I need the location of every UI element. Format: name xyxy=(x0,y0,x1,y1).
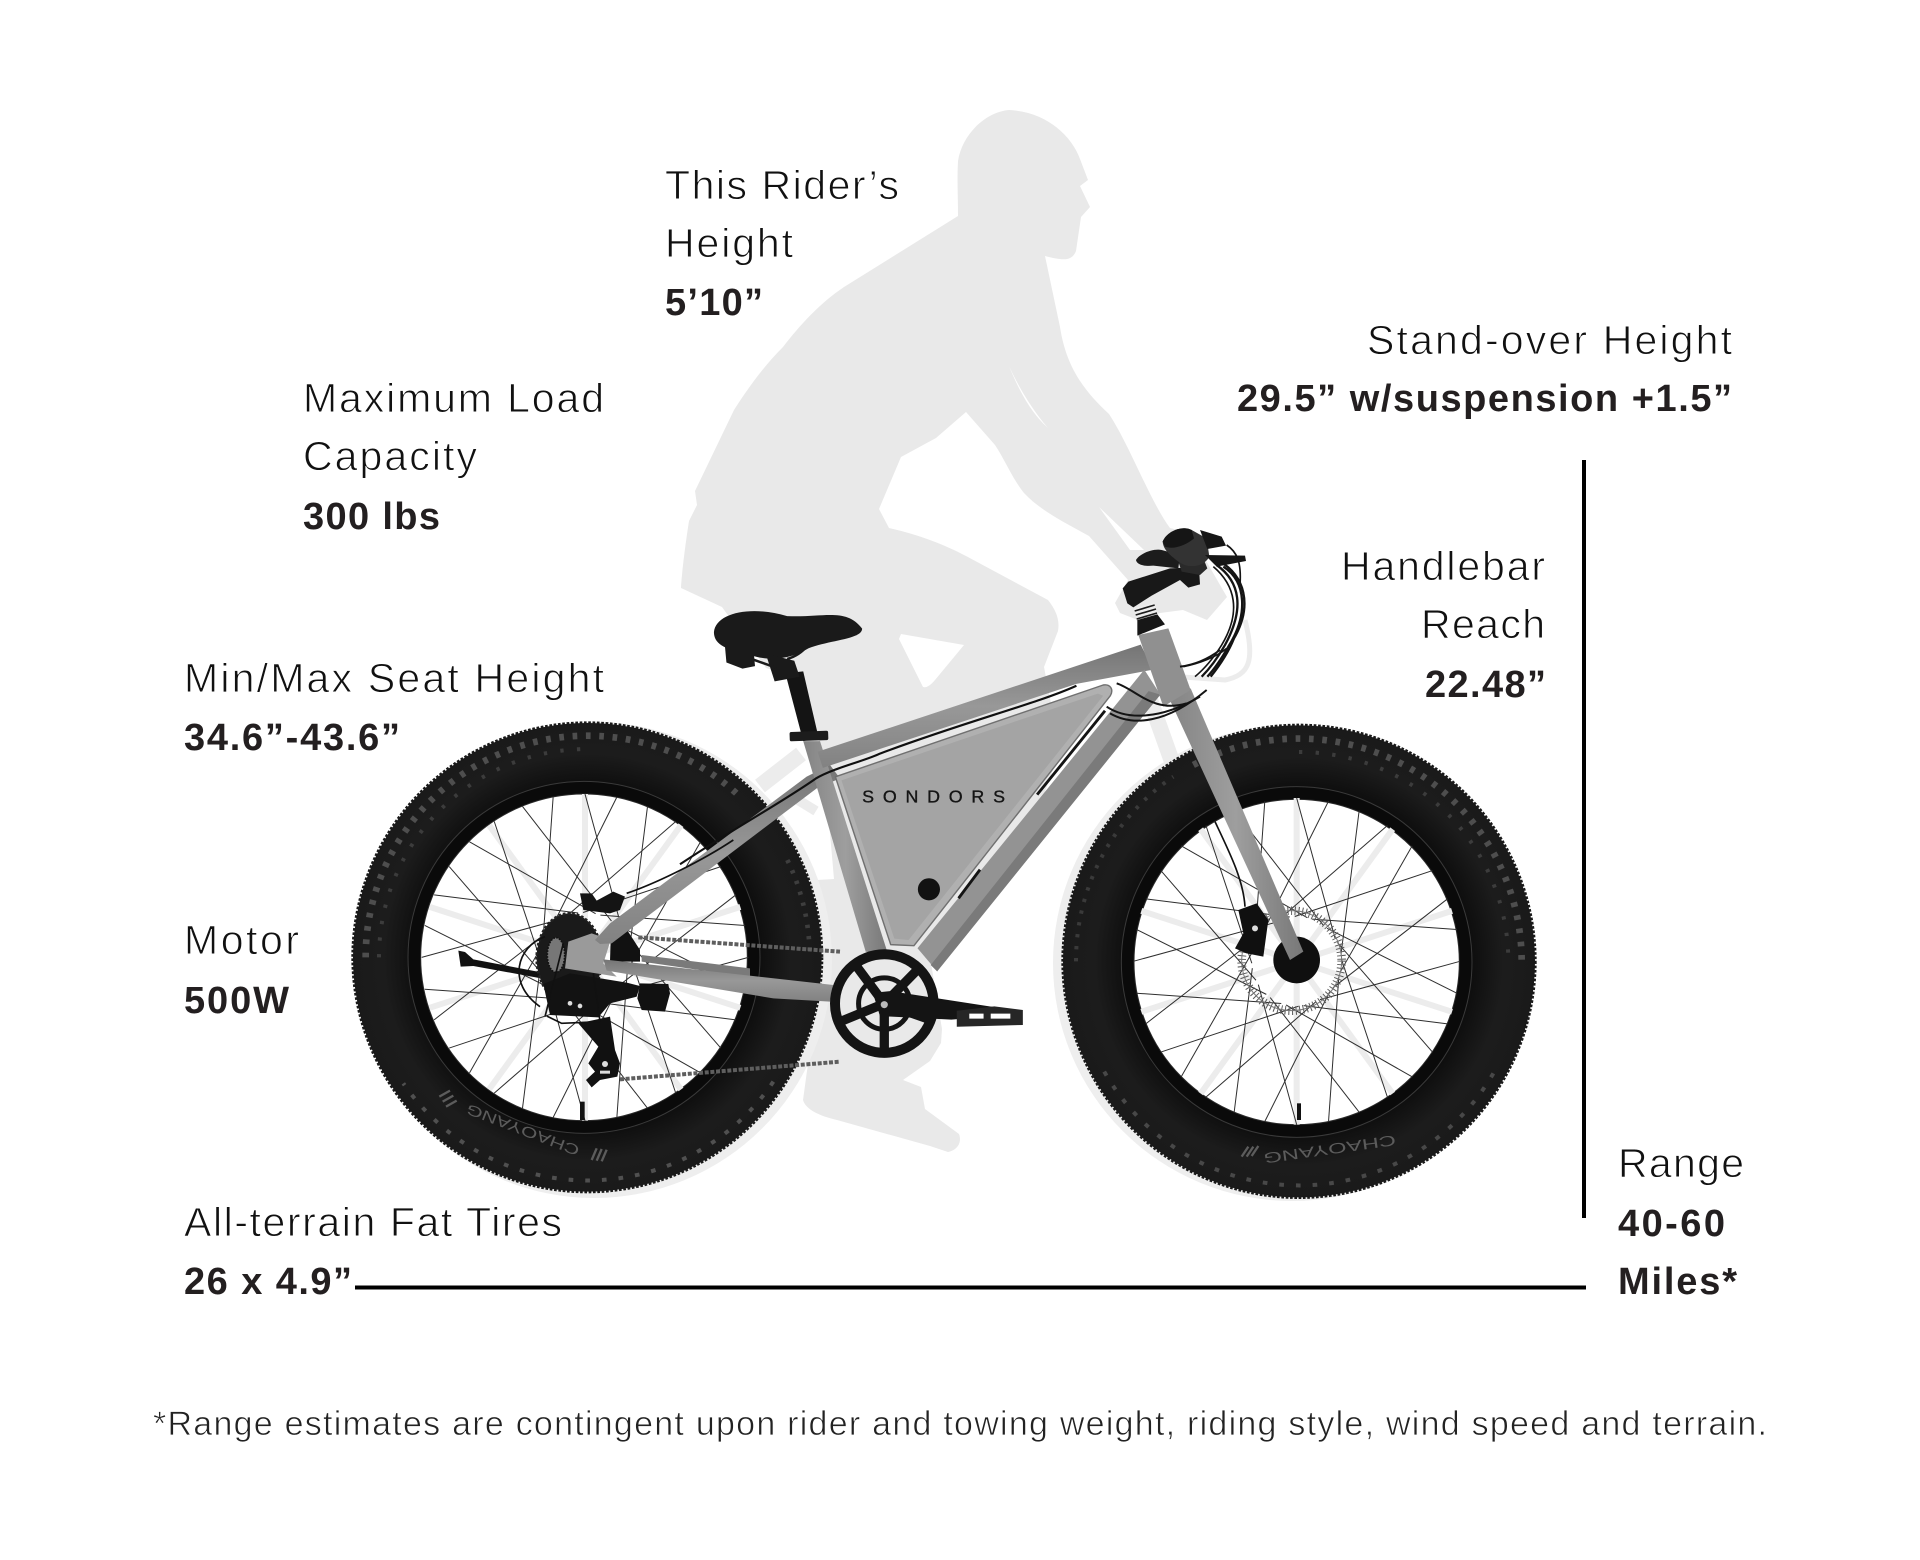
rear frame stays xyxy=(565,765,840,1002)
tire brand text front: CHAOYANG xyxy=(1262,1131,1397,1165)
label: handlebar reach xyxy=(1341,543,1546,706)
label: motor: Motor xyxy=(184,917,299,963)
label: tires xyxy=(184,1199,562,1303)
stem and bar xyxy=(1123,568,1200,607)
label: rider height: This Rider’s xyxy=(665,162,899,208)
brake caliper xyxy=(580,892,625,913)
ghost bike shadow xyxy=(356,620,1531,1201)
chain xyxy=(620,937,840,1079)
label: stand-over height: Stand-over Height xyxy=(1367,317,1733,363)
label: maximum load: 300 lbs xyxy=(303,496,440,538)
label: seat height: Min/Max Seat Height xyxy=(184,655,605,701)
label: range: 40-60 xyxy=(1618,1203,1725,1245)
front spokes xyxy=(1129,794,1464,1129)
label: maximum load xyxy=(303,375,604,538)
label: handlebar reach: Handlebar xyxy=(1341,543,1545,589)
valve xyxy=(575,1102,589,1120)
cassette xyxy=(537,913,602,1003)
label: motor: 500W xyxy=(184,980,289,1022)
battery lock xyxy=(918,878,940,900)
shifter pod xyxy=(1163,528,1209,566)
lower cable bundle xyxy=(1107,650,1220,721)
rear drivetrain xyxy=(458,765,840,1087)
label: seat height: 34.6”-43.6” xyxy=(184,717,400,759)
footnote: *Range estimates are contingent upon rider and towing weight, riding style, wind speed and terrain. xyxy=(153,1405,1767,1443)
bar clamp xyxy=(1178,558,1207,575)
brake line xyxy=(1215,822,1245,907)
fork xyxy=(1168,688,1303,960)
kickstand arm xyxy=(458,951,547,979)
label: handlebar reach: Reach xyxy=(1421,601,1545,647)
seat clamp xyxy=(790,731,828,741)
fork and head tube xyxy=(1107,628,1303,960)
brake cable xyxy=(680,686,1076,864)
label: motor xyxy=(184,917,299,1022)
label: range: Range xyxy=(1618,1140,1744,1186)
disc rotor xyxy=(1242,911,1342,1011)
gaps in silhouette xyxy=(899,366,1144,687)
handlebar cockpit xyxy=(1123,528,1246,677)
label: range xyxy=(1618,1140,1744,1303)
seat tube xyxy=(803,741,888,954)
label: tires: 26 x 4.9” xyxy=(184,1261,352,1303)
label: seat height xyxy=(184,655,605,759)
top tube xyxy=(817,645,1153,768)
rear tire xyxy=(353,723,822,1192)
label: range: Miles* xyxy=(1618,1261,1737,1303)
rear wheel xyxy=(353,723,822,1192)
battery logo: SONDORS xyxy=(862,786,1005,806)
tire brand marks rear xyxy=(439,1091,607,1161)
saddle xyxy=(714,611,862,681)
valve xyxy=(1293,1103,1305,1120)
label: rider height xyxy=(665,162,899,324)
front wheel xyxy=(1063,725,1535,1197)
vertical height line xyxy=(1582,460,1586,1218)
horizontal length line xyxy=(355,1286,1586,1290)
upper cable bundle xyxy=(1183,545,1244,677)
battery box xyxy=(835,685,1112,946)
chainring and crank xyxy=(835,954,1023,1053)
right gear xyxy=(610,929,640,962)
label: maximum load: Maximum Load xyxy=(303,375,604,421)
brake levers xyxy=(1200,530,1246,567)
stem spacers xyxy=(1134,602,1165,636)
down tube xyxy=(917,670,1160,971)
tire brand marks front xyxy=(1242,1146,1258,1157)
label: tires: All-terrain Fat Tires xyxy=(184,1199,562,1245)
head tube xyxy=(1138,628,1191,707)
derailleur cables xyxy=(519,937,600,1023)
rear brake cable xyxy=(627,840,733,893)
label: handlebar reach: 22.48” xyxy=(1425,664,1546,706)
rear mech cluster xyxy=(543,973,670,1087)
rear spokes xyxy=(417,790,753,1125)
label: stand-over height xyxy=(1237,317,1733,420)
label: maximum load: Capacity xyxy=(303,433,478,479)
lower grip xyxy=(1136,550,1180,568)
label: rider height: Height xyxy=(665,220,794,266)
grip cap xyxy=(1163,528,1194,548)
label: rider height: 5’10” xyxy=(665,282,763,324)
tire brand text rear: CHAOYANG xyxy=(464,1100,582,1158)
front hub and caliper xyxy=(1235,903,1320,983)
bike frame and battery xyxy=(680,611,1160,1053)
label: stand-over height: 29.5” w/suspension +1.5” xyxy=(1237,378,1732,420)
seat post xyxy=(785,671,819,741)
front tire xyxy=(1063,725,1535,1197)
rotor rim xyxy=(1242,911,1342,1011)
rider silhouette xyxy=(681,110,1227,1152)
